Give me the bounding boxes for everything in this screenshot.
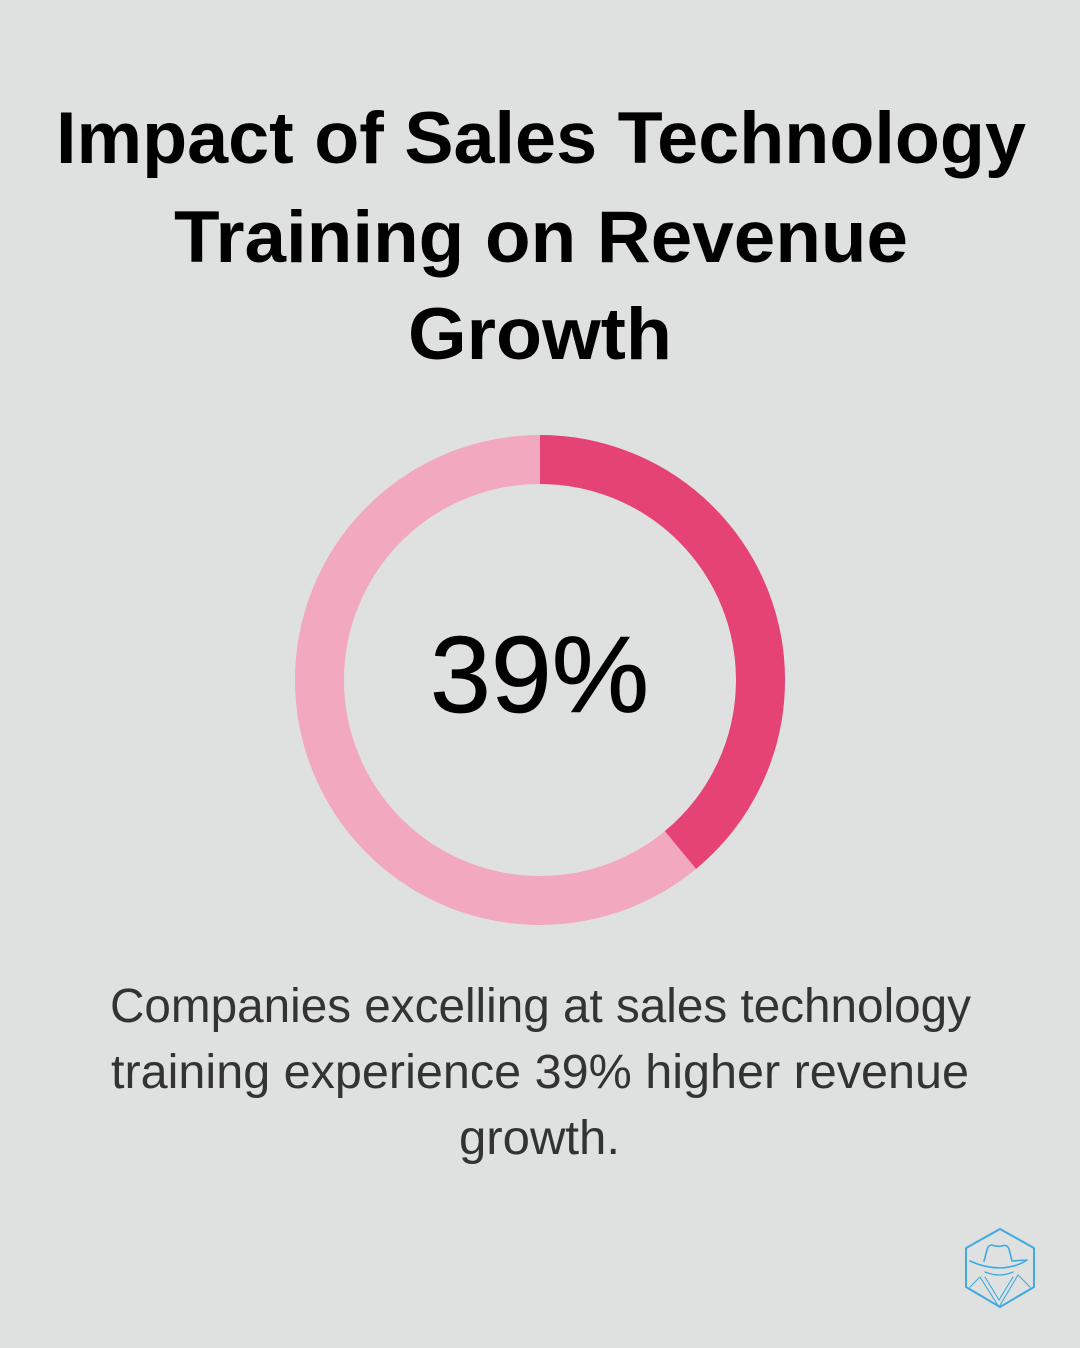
description text: growth. <box>459 1112 620 1165</box>
description text: Companies excelling at sales technology <box>110 980 971 1033</box>
title <box>56 98 1026 375</box>
title: Growth <box>408 294 672 375</box>
title: Impact of Sales Technology <box>56 98 1026 179</box>
description text <box>110 980 971 1165</box>
donut value: 39% <box>430 614 649 736</box>
icon: hexagon logo with hat <box>966 1229 1034 1307</box>
donut chart: 39% <box>320 460 760 900</box>
description text: training experience 39% higher revenue <box>111 1046 969 1099</box>
title: Training on Revenue <box>174 197 908 278</box>
